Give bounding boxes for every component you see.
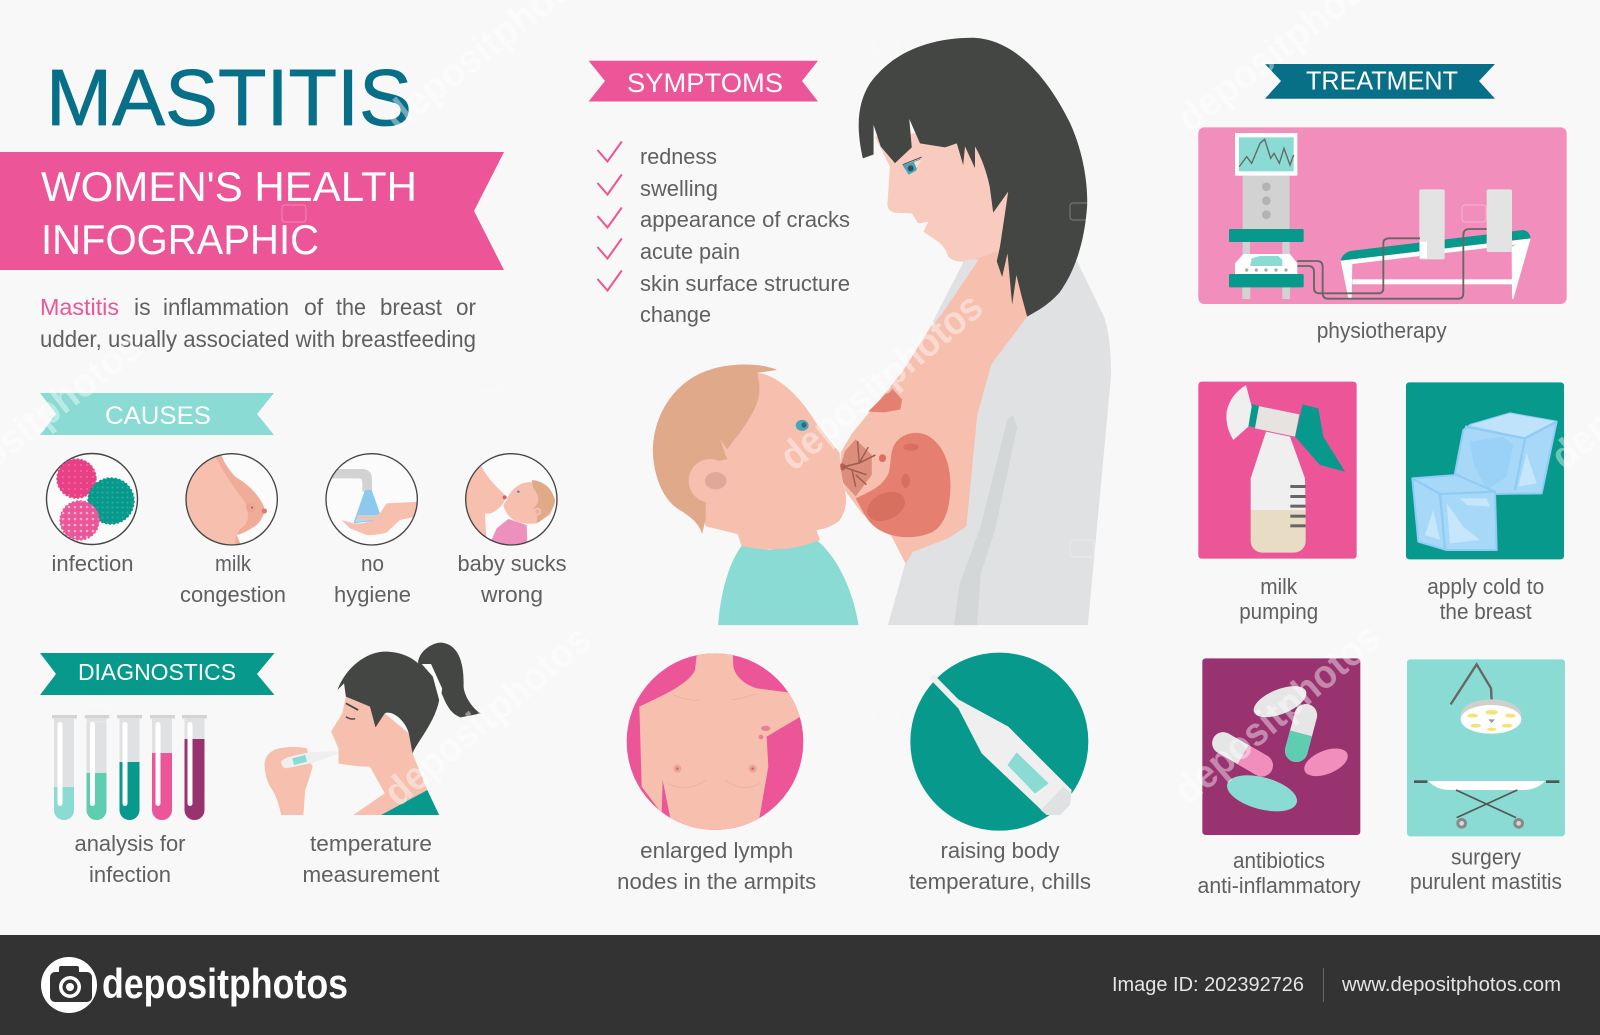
cause: milk congestion xyxy=(180,452,286,607)
symptoms checklist: skin surface structure xyxy=(640,271,850,296)
banner: women's health infographic xyxy=(0,152,504,270)
panel: surgery: surgery xyxy=(1451,844,1521,870)
panel: apply cold to the breast: the breast xyxy=(1440,599,1532,624)
symptom: enlarged lymph nodes: nodes in the armpits xyxy=(617,869,816,894)
heading: causes: CAUSES xyxy=(105,402,211,430)
cause: no hygiene xyxy=(326,454,420,607)
illustration: mother breastfeeding baby xyxy=(653,38,1111,625)
collar xyxy=(927,259,979,332)
panel: milk pumping xyxy=(1198,382,1357,624)
cause: milk congestion: milk xyxy=(215,551,252,576)
banner: women's health infographic: WOMEN'S HEALTH xyxy=(41,163,417,210)
baby's ear xyxy=(689,459,731,502)
baby's shirt xyxy=(718,540,859,625)
cause: baby sucks wrong xyxy=(458,454,566,607)
mother's chest and breast xyxy=(840,178,1034,564)
panel: surgery xyxy=(1407,659,1565,894)
symptom: raising body temperature xyxy=(909,653,1091,894)
heading: diagnostics: DIAGNOSTICS xyxy=(78,659,236,685)
stock photo watermarks xyxy=(0,0,1600,815)
mother's face xyxy=(875,130,1017,262)
panel: physiotherapy xyxy=(1198,127,1567,343)
mother's hair xyxy=(859,38,1087,317)
woman measuring temperature xyxy=(265,643,481,887)
inflamed tissue xyxy=(839,388,950,537)
watermark camera marks xyxy=(85,37,1486,725)
footer divider xyxy=(1323,968,1324,1002)
symptoms checklist: swelling xyxy=(640,176,718,201)
stock photo watermarks: depositphotos xyxy=(772,284,991,479)
mother's eye xyxy=(903,157,922,175)
symptoms checklist: change xyxy=(640,302,711,327)
baby's face xyxy=(691,373,846,550)
cause: baby sucks wrong: wrong xyxy=(480,582,543,607)
stock photo watermarks: depositphotos xyxy=(376,617,599,815)
cause: milk congestion: congestion xyxy=(180,582,286,607)
cause: baby sucks wrong: baby sucks xyxy=(458,551,566,576)
test tubes: analysis for infection: analysis for xyxy=(74,831,186,856)
footer logo: depositphotos xyxy=(102,960,348,1007)
test tubes: analysis for infection: infection xyxy=(89,862,171,887)
intro text block: udder, usually associated with breastfeeding xyxy=(40,326,476,352)
symptom: raising body temperature: raising body xyxy=(940,838,1060,863)
footer logo xyxy=(41,957,348,1013)
panel: milk pumping: pumping xyxy=(1239,599,1318,624)
baby's eye xyxy=(796,420,809,431)
woman measuring temperature: measurement xyxy=(302,862,440,887)
robe fold xyxy=(954,415,1017,625)
panel: antibiotics: antibiotics xyxy=(1233,848,1325,873)
footer bar xyxy=(0,935,1600,1035)
panel: apply cold to the breast: apply cold to xyxy=(1427,574,1544,599)
symptoms checklist: redness xyxy=(640,144,717,169)
heading: symptoms xyxy=(589,61,818,102)
intro text block: the xyxy=(336,294,366,320)
heading: treatment xyxy=(1265,64,1495,99)
intro text block: Mastitis xyxy=(40,294,119,320)
title: MASTITIS xyxy=(46,53,412,142)
intro text block: inflammation xyxy=(163,294,289,320)
cause: infection: infection xyxy=(52,551,134,576)
footer image id: Image ID: 202392726 xyxy=(1112,974,1304,996)
heading: symptoms: SYMPTOMS xyxy=(627,68,783,98)
intro text block xyxy=(40,294,476,352)
banner: women's health infographic: INFOGRAPHIC xyxy=(41,216,319,263)
intro text block: of xyxy=(304,294,324,320)
cause: no hygiene: hygiene xyxy=(334,582,411,607)
panel: antibiotics xyxy=(1198,658,1360,898)
cause: infection xyxy=(46,454,138,576)
intro text block: is xyxy=(134,294,151,320)
symptoms checklist: appearance of cracks xyxy=(640,207,850,232)
symptom: enlarged lymph nodes: enlarged lymph xyxy=(640,838,793,863)
symptoms checklist: acute pain xyxy=(640,239,740,264)
heading: treatment: TREATMENT xyxy=(1306,66,1458,96)
mother's robe xyxy=(888,257,1111,625)
heading: diagnostics xyxy=(40,653,274,695)
baby's hair xyxy=(653,365,777,534)
footer website: www.depositphotos.com xyxy=(1341,974,1561,996)
symptom: enlarged lymph nodes xyxy=(617,650,816,894)
heading: causes xyxy=(40,393,274,435)
panel: surgery: purulent mastitis xyxy=(1410,869,1562,894)
panel: antibiotics: anti-inflammatory xyxy=(1198,873,1360,898)
woman measuring temperature: temperature xyxy=(310,831,432,856)
intro text block: or xyxy=(456,294,476,320)
cause: no hygiene: no xyxy=(361,551,384,576)
symptoms checklist xyxy=(598,142,850,327)
panel: physiotherapy: physiotherapy xyxy=(1317,318,1447,343)
stock photo watermarks: depositphotos xyxy=(1166,615,1389,813)
panel: milk pumping: milk xyxy=(1260,574,1298,599)
intro text block: breast xyxy=(380,294,443,320)
panel: apply cold to the breast xyxy=(1406,382,1564,624)
test tubes: analysis for infection xyxy=(52,715,207,887)
symptom: raising body temperature: temperature, chills xyxy=(909,869,1091,894)
